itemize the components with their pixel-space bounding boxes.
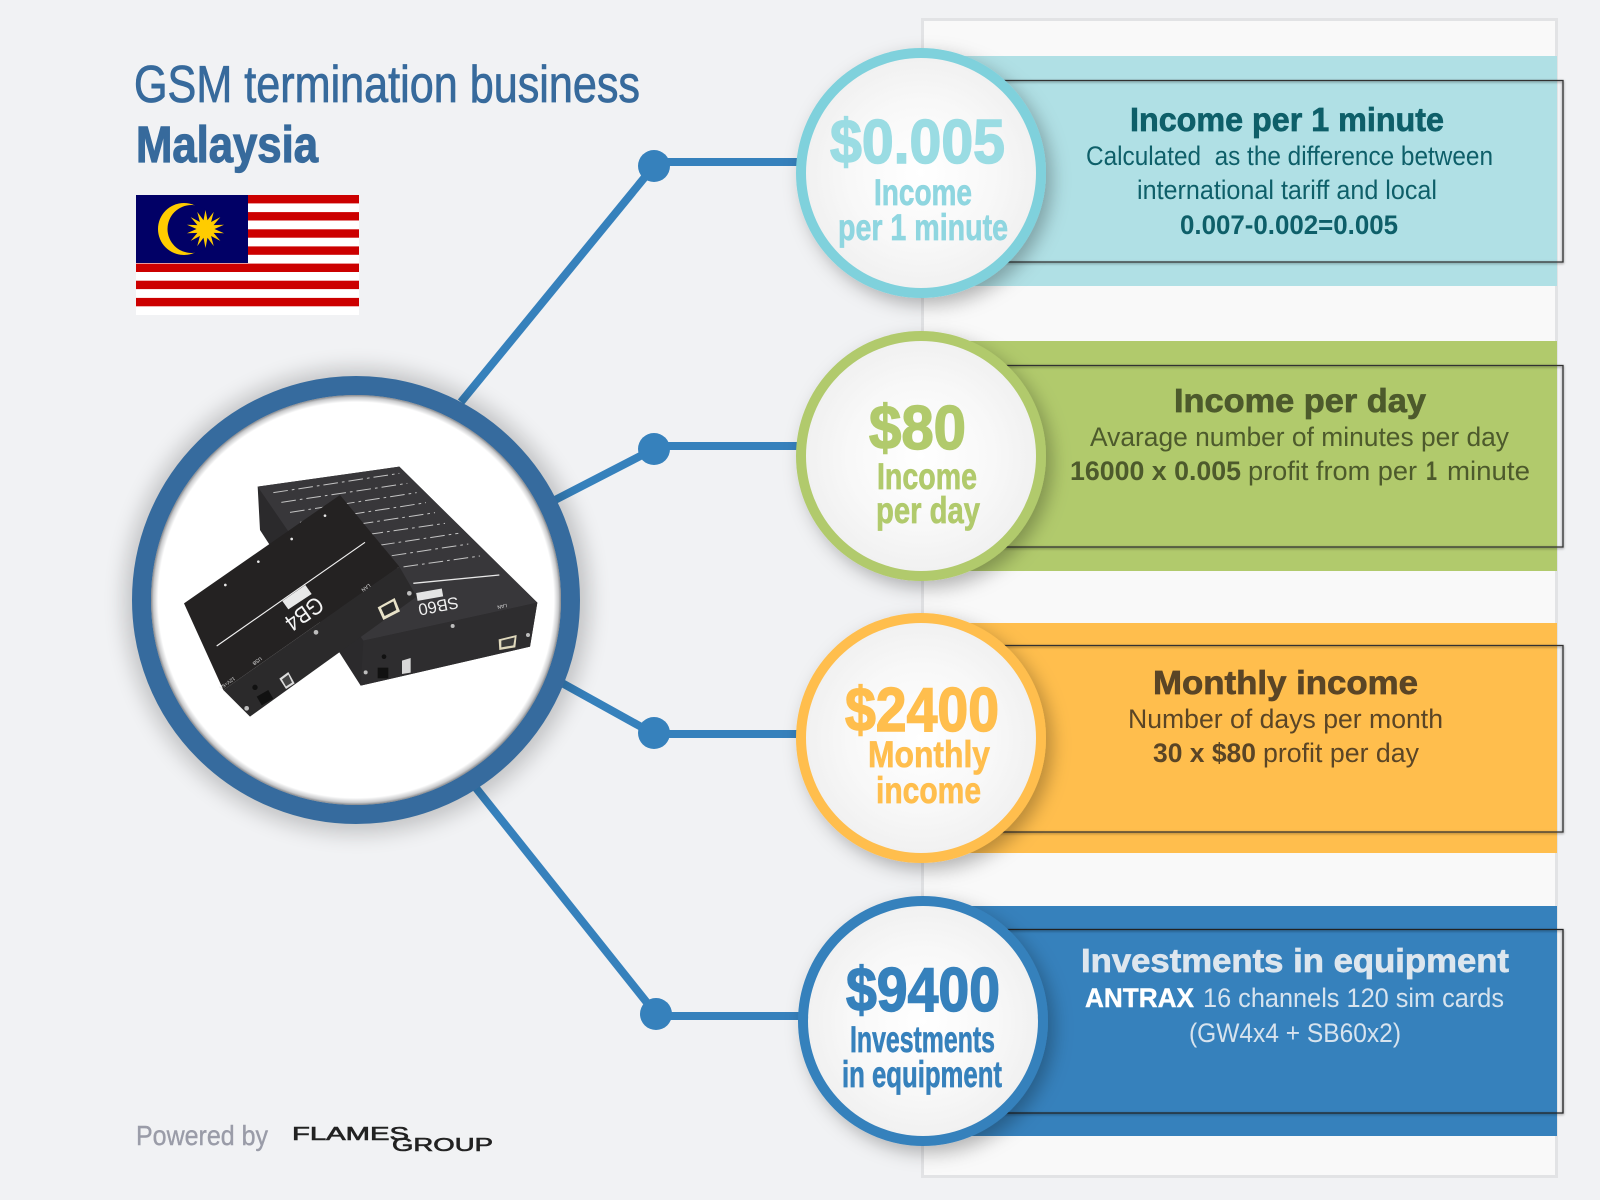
text block: income per day: Income per day	[1174, 382, 1427, 419]
text block: income per 1 minute: international tariff and local	[1137, 175, 1437, 205]
footer: powered by	[136, 1120, 493, 1155]
device photo: SB60 and GB4 gateways: SB60	[417, 593, 460, 619]
text block: monthly income: 30 x $80	[1153, 738, 1256, 768]
text block: investments in equipment: Investments in equipment	[1081, 942, 1509, 979]
metric circle: $9400	[803, 901, 1043, 1141]
text block: income per day: 16000 x 0.005	[1070, 456, 1241, 486]
metric circle: $2400: income	[876, 770, 981, 811]
metric circle: $2400: $2400	[845, 676, 999, 745]
metric circle: $0.005	[801, 53, 1041, 293]
text block: monthly income: Monthly income	[1153, 664, 1418, 701]
title	[134, 56, 640, 173]
metric circle: $9400: $9400	[846, 956, 1000, 1025]
text block: income per day: profit from per	[1248, 456, 1417, 486]
device photo: SB60 and GB4 gateways: USB	[250, 655, 263, 666]
metric circle: $9400: in equipment	[842, 1054, 1002, 1095]
text block: investments in equipment: ANTRAX	[1085, 983, 1194, 1013]
device photo: SB60 and GB4 gateways: 12V=5A	[217, 675, 236, 691]
text block: income per day: 1	[1426, 456, 1437, 486]
text block: income per day: Avarage number of minutes per day	[1090, 422, 1509, 452]
text block: investments in equipment: (GW4x4 + SB60x2)	[1189, 1018, 1401, 1048]
metric circle: $0.005: $0.005	[830, 108, 1005, 177]
metric circle: $2400: Monthly	[868, 734, 990, 775]
metric circle: $80: $80	[869, 394, 966, 463]
text block: investments in equipment: 16 channels 120 sim cards	[1203, 983, 1504, 1013]
text block: income per 1 minute	[1086, 101, 1493, 240]
metric circle: $2400	[801, 618, 1041, 858]
text block: investments in equipment	[1081, 942, 1509, 1048]
band: income per minute	[921, 56, 1563, 286]
central device circle	[125, 369, 589, 833]
text block: monthly income: profit per day	[1263, 738, 1419, 768]
text block: income per day	[1070, 382, 1530, 486]
logo: Flames Group	[292, 1124, 493, 1155]
device photo: SB60 and GB4 gateways	[184, 467, 537, 717]
metric circle: $9400: Investments	[850, 1019, 995, 1060]
title: GSM termination business	[134, 56, 640, 114]
metric circle: $80: Income	[877, 456, 977, 497]
text block: income per day: minute	[1447, 456, 1530, 486]
metric circle: $0.005: per 1 minute	[838, 207, 1008, 248]
icon: Malaysia flag	[136, 195, 359, 315]
device photo: SB60 and GB4 gateways: GB4	[280, 591, 329, 636]
metric circle: $80	[801, 336, 1041, 576]
device photo: SB60 and GB4 gateways: LAN	[360, 582, 371, 593]
text block: monthly income: Number of days per month	[1128, 704, 1443, 734]
text block: income per 1 minute: 0.007-0.002=0.005	[1180, 210, 1398, 240]
metric circle: $0.005: Income	[874, 172, 972, 213]
band: income per day	[921, 341, 1563, 571]
panel: right white backing	[922, 20, 1556, 1176]
footer: powered by: Powered by	[136, 1120, 268, 1151]
metric circle: $80: per day	[876, 490, 980, 531]
text block: income per 1 minute: Income per 1 minute	[1130, 101, 1444, 138]
logo: Flames Group: GROUP	[392, 1135, 493, 1155]
text block: monthly income	[1128, 664, 1443, 768]
title: Malaysia	[136, 116, 319, 173]
text block: income per 1 minute: Calculated as the difference between	[1086, 141, 1493, 171]
device photo: SB60 and GB4 gateways: LAN	[496, 602, 507, 610]
band: monthly income	[921, 623, 1563, 853]
connector lines	[461, 150, 800, 1030]
band: investments	[921, 906, 1563, 1136]
logo: Flames Group: FLAMES	[292, 1124, 409, 1144]
